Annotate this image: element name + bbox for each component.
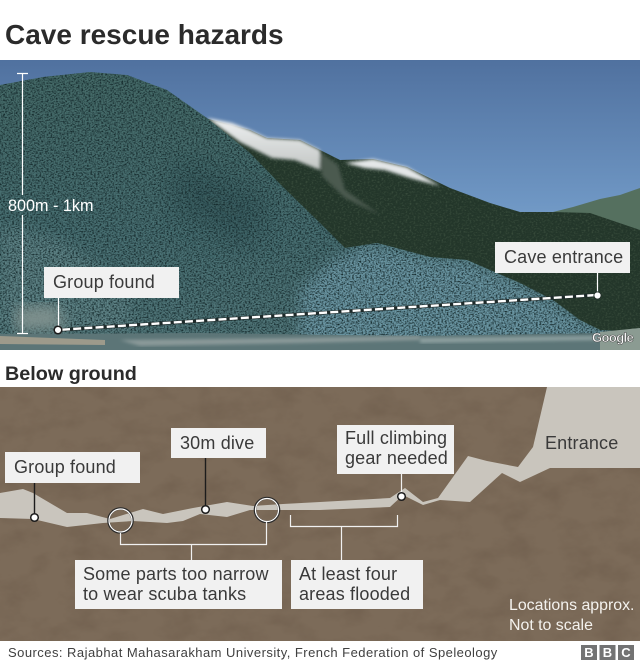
bracket: flooded areas [290,515,398,560]
label: group found (cave) [5,452,140,521]
label: climbing gear: Full climbing [345,428,447,448]
subheading: Below ground [5,363,137,385]
bracket: narrow parts [120,522,266,560]
narrow point circles [108,498,279,532]
main teal mountain [0,72,614,336]
BBC logo: B [603,645,612,660]
label: cave entrance [495,242,630,299]
lighter lower slope [294,243,610,336]
label: narrow parts: Some parts too narrow [83,564,269,584]
note: locations approximate: Not to scale [509,617,593,634]
label: narrow parts: to wear scuba tanks [83,584,246,604]
label: climbing gear [337,425,454,500]
label: group found (cave): Group found [14,457,116,477]
sky [0,60,640,350]
label: entrance: Entrance [545,433,618,453]
label: group found (aerial): Group found [53,272,155,292]
height label: 800m - 1km [8,197,93,215]
google credit: Google [592,330,634,345]
title: Cave rescue hazards [5,19,284,50]
snowy cloud patches on ridge [207,118,440,215]
label: climbing gear: gear needed [345,448,448,468]
BBC logo: B [584,645,594,660]
BBC logo: C [621,645,631,660]
source line: Sources: Rajabhat Mahasarakham University, French Federation of Speleology [8,645,498,660]
panel: cave cross-section [0,387,640,641]
dashed route line [58,295,597,330]
label: 30m dive: 30m dive [180,433,254,453]
label: flooded areas [291,560,423,609]
cave passage [0,387,640,527]
label: 30m dive [171,428,266,513]
valley floor [0,305,640,350]
height scale [8,73,93,334]
note: locations approximate: Locations approx. [509,597,634,614]
distant hill [553,188,640,240]
label: narrow parts [75,560,282,609]
label: group found (aerial) [44,267,179,334]
panel: aerial view of mountain [0,60,640,360]
dark forested ridge [208,118,640,331]
label: flooded areas: At least four [299,564,397,584]
label: flooded areas: areas flooded [299,584,410,604]
note: locations approximate [509,597,634,634]
earth background [0,387,640,641]
label: cave entrance: Cave entrance [504,247,623,267]
BBC logo [581,645,634,660]
